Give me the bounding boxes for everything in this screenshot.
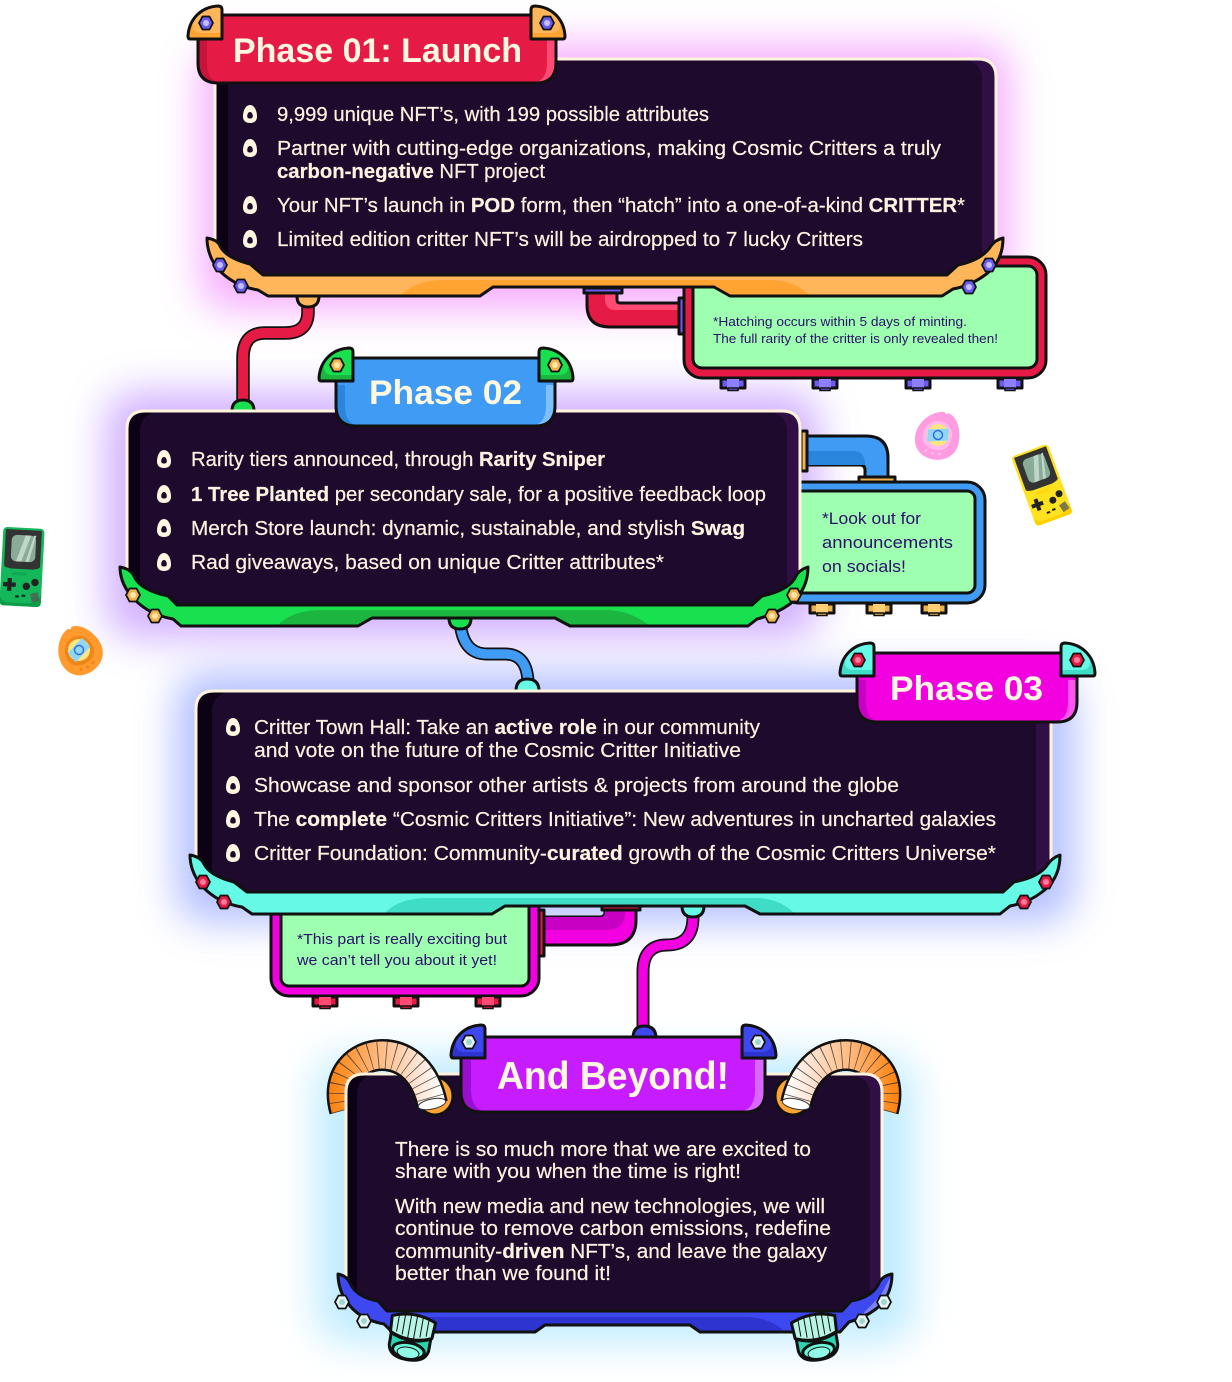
- text: paragraph 1: [395, 1139, 811, 1183]
- note text: exciting line 2: we can’t tell you about it yet!: [296, 953, 497, 969]
- header: phase 03: [840, 643, 1095, 722]
- text: paragraph 2: continue to remove carbon emissions, redefine: [395, 1218, 831, 1240]
- text: paragraph 2: [395, 1196, 831, 1285]
- note: socials: [780, 482, 985, 616]
- list item: merch store: Merch Store launch: dynamic, sustainable, and stylish Swag: [191, 518, 745, 540]
- tray: and beyond: [335, 1274, 892, 1332]
- list item: 9,999 NFTs: 9,999 unique NFT’s, with 199 possible attributes: [277, 104, 709, 126]
- hose: left front: [386, 1039, 454, 1116]
- knob: right: [791, 1311, 842, 1363]
- icon: orange tamagotchi: [47, 617, 111, 683]
- list item: tree planted: 1 Tree Planted per secondary sale, for a positive feedback loop: [191, 484, 766, 506]
- list item: town hall: [226, 717, 760, 762]
- list item: airdrop: Limited edition critter NFT’s will be airdropped to 7 lucky Critters: [277, 229, 863, 251]
- note text: socials line 1: *Look out for: [822, 509, 921, 528]
- pipe: phase 02 to note: [801, 431, 895, 482]
- heading: phase 03: Phase 03: [890, 670, 1043, 708]
- glow: phase 03: [176, 672, 1074, 922]
- heading: and beyond: And Beyond!: [497, 1055, 729, 1098]
- icon: pink tamagotchi: [911, 405, 966, 465]
- list item: giveaways: Rad giveaways, based on unique Critter attributes*: [191, 552, 664, 574]
- list item: POD form: Your NFT’s launch in POD form, then “hatch” into a one-of-a-kind CRITTER*: [277, 195, 965, 217]
- tray: phase 02: [120, 567, 808, 626]
- list item: carbon-negative: Partner with cutting-edge organizations, making Cosmic Critters a truly: [277, 138, 941, 160]
- glow: phase 04: [316, 1056, 914, 1342]
- text: paragraph 2: community-driven NFT’s, and leave the galaxy: [395, 1241, 827, 1263]
- list item: showcase: Showcase and sponsor other artists & projects from around the globe: [254, 775, 899, 797]
- note text: hatching line 2: The full rarity of the critter is only revealed then!: [713, 331, 998, 346]
- note text: exciting line 1: *This part is really exciting but: [297, 932, 507, 948]
- glow: phase 01: [200, 44, 1010, 310]
- text: paragraph 2: With new media and new technologies, we will: [395, 1196, 825, 1218]
- heading: phase 02: Phase 02: [369, 374, 522, 412]
- panel: phase 02: [126, 410, 802, 604]
- panel: phase 03: [194, 690, 1052, 890]
- text: paragraph 1: There is so much more that we are excited to: [395, 1139, 811, 1161]
- knob: left: [385, 1311, 436, 1363]
- note text: socials line 2: announcements: [822, 533, 953, 552]
- tray: phase 03: [190, 855, 1060, 914]
- list item: carbon-negative: carbon-negative NFT project: [277, 161, 545, 183]
- hose: right back: [796, 1055, 885, 1110]
- header: phase 02: [319, 348, 573, 426]
- pipe: phase 02 to phase 03: [449, 618, 539, 691]
- note bolts: hatching: [721, 379, 1022, 390]
- note: hatching: [684, 257, 1046, 390]
- pipe: phase 01 to phase 02: [232, 296, 319, 411]
- header: and beyond: [451, 1025, 776, 1112]
- pipe: phase 03 to note: [538, 905, 640, 956]
- list item: town hall: and vote on the future of the Cosmic Critter Initiative: [254, 740, 741, 762]
- note text: hatching line 1: *Hatching occurs within 5 days of minting.: [713, 314, 967, 329]
- hose: right front: [774, 1039, 842, 1116]
- list item: initiative: The complete “Cosmic Critters Initiative”: New adventures in uncharted galaxies: [254, 809, 996, 831]
- pipe: phase 01 to note: [584, 288, 685, 334]
- list item: carbon-negative: [243, 138, 941, 183]
- note: exciting: [271, 880, 539, 1008]
- list item: town hall: Critter Town Hall: Take an active role in our community: [254, 717, 760, 739]
- icon: green handheld: [0, 527, 45, 607]
- icon: yellow handheld: [1011, 444, 1073, 526]
- note bolts: exciting: [313, 997, 500, 1008]
- heading: phase 01: Phase 01: Launch: [233, 32, 522, 70]
- glow: phase 02: [106, 392, 819, 638]
- pipe: phase 03 to beyond: [633, 906, 704, 1038]
- list item: foundation: Critter Foundation: Community- curated growth of the Cosmic Critters Universe*: [254, 843, 996, 865]
- tray: phase 01: [207, 238, 1003, 296]
- panel: and beyond: [344, 1072, 884, 1310]
- list item: rarity tiers: Rarity tiers announced, through Rarity Sniper: [191, 449, 605, 471]
- text: paragraph 1: share with you when the time is right!: [395, 1161, 741, 1183]
- hose: left back: [343, 1055, 432, 1110]
- panel: phase 01: [214, 58, 998, 274]
- text: paragraph 2: better than we found it!: [395, 1263, 611, 1285]
- note text: socials line 3: on socials!: [822, 557, 906, 576]
- header: phase 01: [188, 6, 565, 83]
- note bolts: socials: [810, 604, 946, 616]
